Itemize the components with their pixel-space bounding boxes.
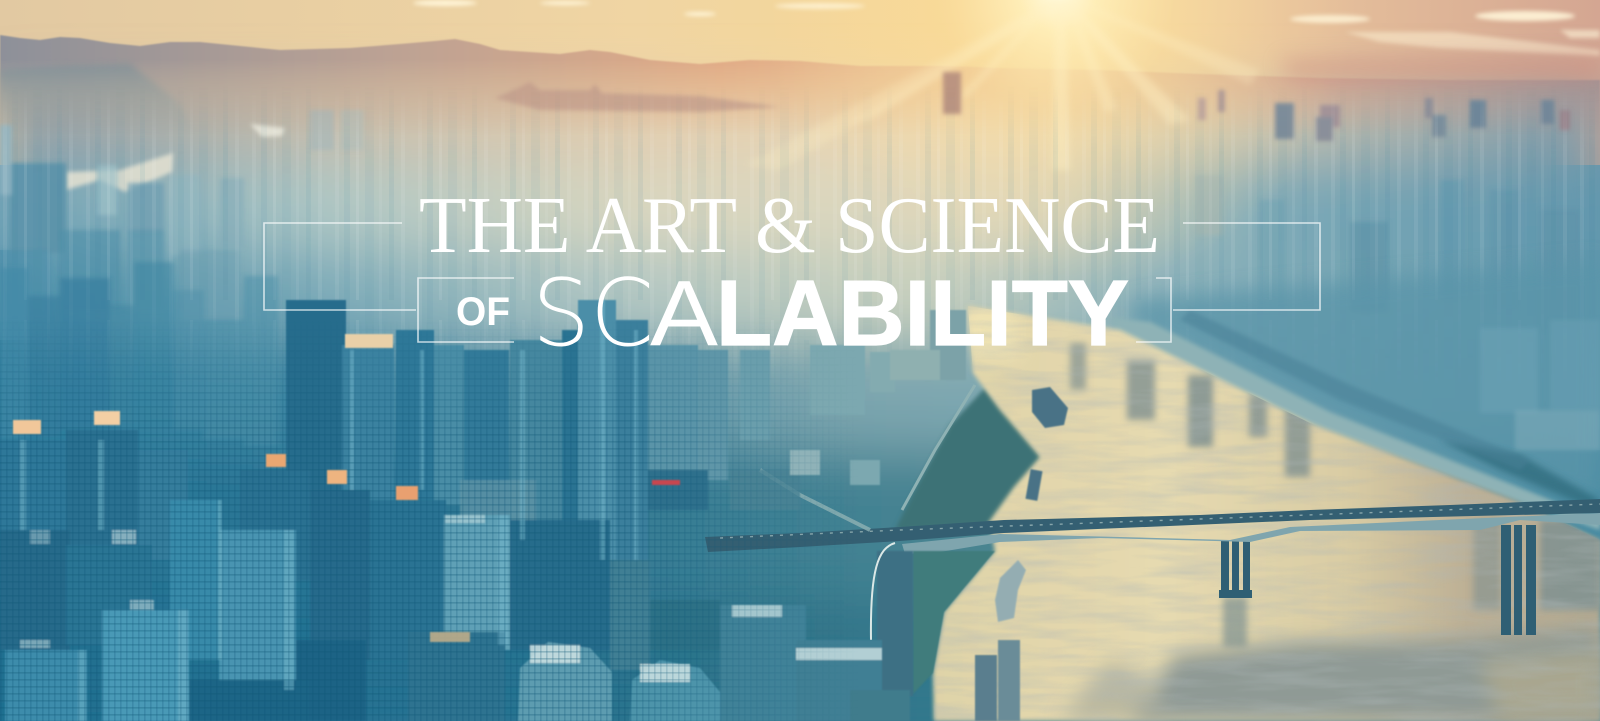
bridge deck: [705, 499, 1600, 552]
pier reflections: [1223, 597, 1247, 647]
rooftops: [20, 515, 882, 682]
title line one: THE ART & SCIENCE: [419, 182, 1160, 270]
upper-left river glimpses: [66, 124, 285, 192]
background: colour base rows: [0, 165, 1600, 721]
river reflections: [1070, 343, 1600, 610]
near hill, left: [0, 62, 178, 116]
mountain ridge: [0, 34, 1600, 124]
clouds: [413, 0, 1600, 56]
ridge island: [495, 82, 780, 112]
title line two: LABILITY: LABILITY: [716, 261, 1129, 365]
title: [419, 182, 1160, 367]
title line two: SC: SC: [532, 259, 654, 367]
window grid texture: [0, 320, 860, 721]
lit rooftops: [13, 334, 680, 642]
shaded lower water: [1130, 628, 1600, 721]
sun glint: [960, 300, 1020, 360]
water ripple texture: [930, 300, 1600, 721]
haze skyline: distant towers: [0, 72, 1580, 330]
background: sky: [0, 0, 1600, 170]
bridge piers: [1219, 525, 1536, 635]
bridge: [705, 499, 1600, 647]
haze vertical streaks: [3, 117, 1595, 332]
title line two: OF: OF: [456, 290, 510, 334]
river: [930, 300, 1600, 721]
mid-distance towers, left: [0, 262, 278, 446]
sun rays: [745, 0, 1260, 170]
road and bank below bridge: [760, 385, 995, 696]
right-bank city and embankment: [1110, 260, 1600, 530]
boats: [975, 387, 1068, 721]
pink cloud band: [1280, 55, 1600, 80]
title line two: A: A: [650, 261, 718, 365]
mid-distance towers, centre: [286, 300, 966, 570]
foreground towers, left: [0, 300, 910, 721]
left-bank green slope: [895, 388, 1045, 530]
bridge underside: [902, 513, 1600, 554]
title frame lines: [264, 223, 1320, 342]
sun glow: [700, 0, 1420, 300]
bright facades: [20, 300, 638, 721]
